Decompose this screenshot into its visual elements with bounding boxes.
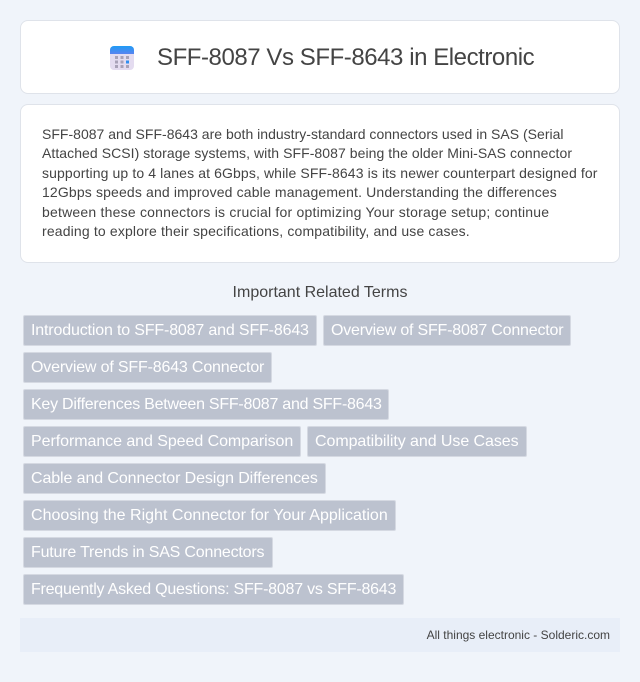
tag: future trends xyxy=(23,537,273,568)
tag: compatibility: Compatibility and Use Cases xyxy=(315,433,519,450)
tag: faq: Frequently Asked Questions: SFF-8087 vs SFF-8643 xyxy=(31,581,396,598)
tag: overview 8643: Overview of SFF-8643 Connector xyxy=(31,359,264,376)
panel: intro paragraph: between these connectors is crucial for optimizing Your storage setup; continue xyxy=(42,204,549,220)
tag: cable design xyxy=(23,463,326,494)
tag: performance xyxy=(23,426,301,457)
panel: intro paragraph xyxy=(20,104,620,263)
tag: introduction: Introduction to SFF-8087 and SFF-8643 xyxy=(31,322,309,339)
icon: calendar app xyxy=(110,46,134,70)
panel: title card xyxy=(20,20,620,94)
tag: overview 8643 xyxy=(23,352,272,383)
tag: overview 8087: Overview of SFF-8087 Connector xyxy=(331,322,563,339)
tag: faq xyxy=(23,574,404,605)
tag: key differences xyxy=(23,389,389,420)
panel: intro paragraph: Attached SCSI) storage systems, with SFF-8087 being the older Mini-SAS connector xyxy=(42,145,572,161)
tag: key differences: Key Differences Between SFF-8087 and SFF-8643 xyxy=(31,396,382,413)
panel: intro paragraph: SFF-8087 and SFF-8643 are both industry-standard connectors used in SAS (Serial xyxy=(42,126,564,142)
title: SFF-8087 Vs SFF-8643 in Electronic xyxy=(157,44,534,71)
tag: compatibility xyxy=(307,426,527,457)
heading: related terms: Important Related Terms xyxy=(233,284,407,301)
tag: choosing connector xyxy=(23,500,396,531)
tag: performance: Performance and Speed Comparison xyxy=(31,433,293,450)
tag: introduction xyxy=(23,315,317,346)
footer bar: All things electronic - Solderic.com xyxy=(427,628,610,642)
tag: cable design: Cable and Connector Design Differences xyxy=(31,470,318,487)
tag: future trends: Future Trends in SAS Connectors xyxy=(31,544,264,561)
panel: intro paragraph: supporting up to 4 lanes at 6Gbps, while SFF-8643 is its newer counterpart designed for xyxy=(42,165,598,181)
panel: intro paragraph: reading to explore their specifications, compatibility, and use cases. xyxy=(42,223,470,239)
tag: overview 8087 xyxy=(323,315,571,346)
tag: choosing connector: Choosing the Right Connector for Your Application xyxy=(31,507,388,524)
footer bar xyxy=(20,618,620,652)
panel: intro paragraph: 12Gbps speeds and improved cable management. Understanding the differences xyxy=(42,184,557,200)
